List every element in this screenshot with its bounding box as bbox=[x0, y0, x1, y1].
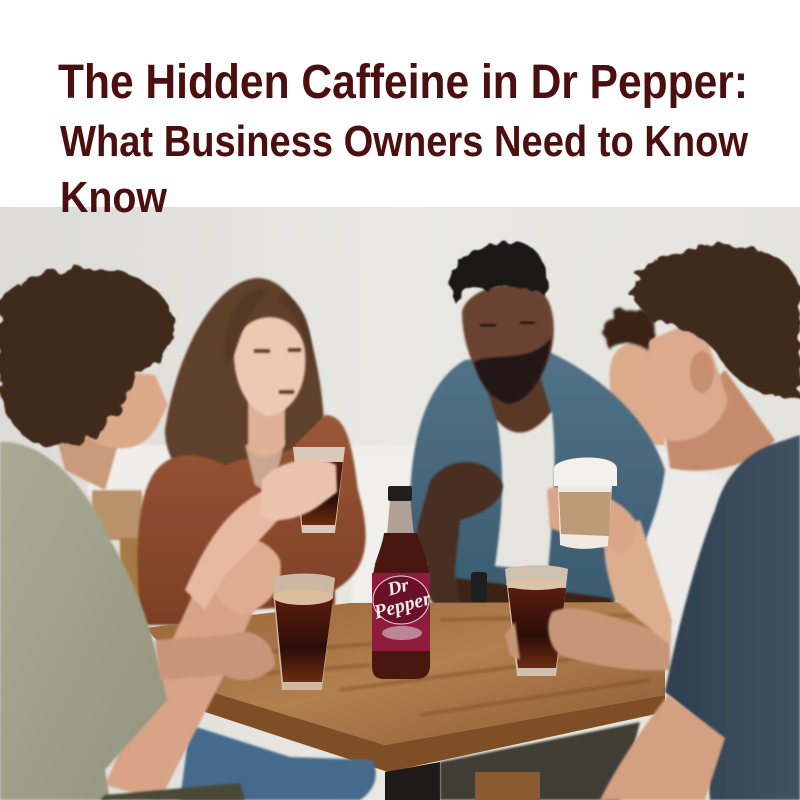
woman's hand and glass bbox=[185, 447, 345, 610]
title bbox=[58, 56, 749, 222]
person: back man with white tee bbox=[604, 308, 725, 640]
glass: right bbox=[505, 565, 568, 676]
man arm and fist bbox=[416, 462, 503, 612]
label text bbox=[366, 570, 433, 624]
person: left boy in olive shirt bbox=[0, 269, 281, 800]
table leg bbox=[385, 762, 440, 800]
man right forearm bbox=[455, 578, 618, 615]
white tee bbox=[495, 412, 555, 572]
wall background bbox=[0, 207, 800, 800]
woman hair back bbox=[165, 278, 324, 530]
hand bbox=[547, 486, 636, 553]
woman's arm bbox=[185, 490, 282, 610]
neck bbox=[482, 370, 551, 433]
person: front right boy bbox=[600, 245, 800, 800]
bottle: Dr Pepper bbox=[366, 486, 433, 679]
face bbox=[642, 318, 728, 441]
right hand around glass bbox=[548, 608, 670, 670]
second hand bbox=[155, 632, 275, 680]
denim shirt bbox=[410, 350, 665, 610]
navy t-shirt bbox=[665, 435, 800, 800]
forearm bbox=[105, 565, 262, 800]
hand bbox=[205, 537, 281, 615]
left fingers at right glass bbox=[505, 622, 520, 660]
neck bbox=[55, 420, 125, 490]
glass: left bbox=[272, 574, 335, 690]
woman neck bbox=[248, 395, 285, 457]
bottle cap bbox=[388, 486, 412, 501]
wooden table bbox=[145, 602, 665, 800]
woman undershirt bbox=[245, 440, 285, 495]
hair bbox=[632, 245, 800, 399]
glass contents bbox=[298, 462, 343, 525]
woman's fingers bbox=[260, 460, 337, 520]
arm bbox=[600, 695, 725, 800]
bottle glass neck bbox=[374, 500, 428, 565]
arm bbox=[604, 520, 672, 645]
watch bbox=[471, 572, 487, 603]
table front edge bbox=[205, 690, 665, 772]
shirt bbox=[0, 442, 167, 800]
face bbox=[462, 284, 554, 400]
woman hair top bbox=[225, 290, 312, 370]
chair bbox=[475, 772, 540, 800]
person: woman in rust sweater bbox=[137, 278, 366, 625]
table top bbox=[145, 602, 665, 745]
person: central man in denim bbox=[410, 243, 665, 615]
back man arm and hand with cup bbox=[547, 457, 672, 645]
bottle label bbox=[372, 573, 430, 651]
ear bbox=[690, 351, 714, 393]
bottle body bbox=[372, 533, 430, 679]
label sub-badge bbox=[382, 626, 422, 640]
woman features bbox=[254, 350, 301, 392]
hair bbox=[0, 269, 173, 447]
dark waist shade bbox=[100, 783, 245, 800]
eyes bbox=[480, 322, 535, 326]
wood grain bbox=[230, 615, 650, 715]
beard bbox=[474, 338, 551, 404]
wall rail and wood cabinet bbox=[88, 445, 422, 608]
hair bbox=[447, 243, 548, 306]
label text: Pepper bbox=[371, 587, 433, 624]
woman sweater bbox=[137, 415, 366, 625]
face bbox=[90, 370, 168, 448]
jeans bbox=[180, 725, 376, 800]
woman face bbox=[234, 317, 305, 416]
label oval bbox=[373, 576, 429, 624]
coffee cup bbox=[554, 457, 617, 549]
neck bbox=[665, 370, 775, 471]
label text: Dr bbox=[384, 574, 412, 601]
photo: team discussing drinks bbox=[0, 207, 800, 800]
title: Know bbox=[60, 173, 168, 222]
dark trousers bbox=[440, 722, 640, 800]
woman's glass bbox=[293, 447, 345, 533]
